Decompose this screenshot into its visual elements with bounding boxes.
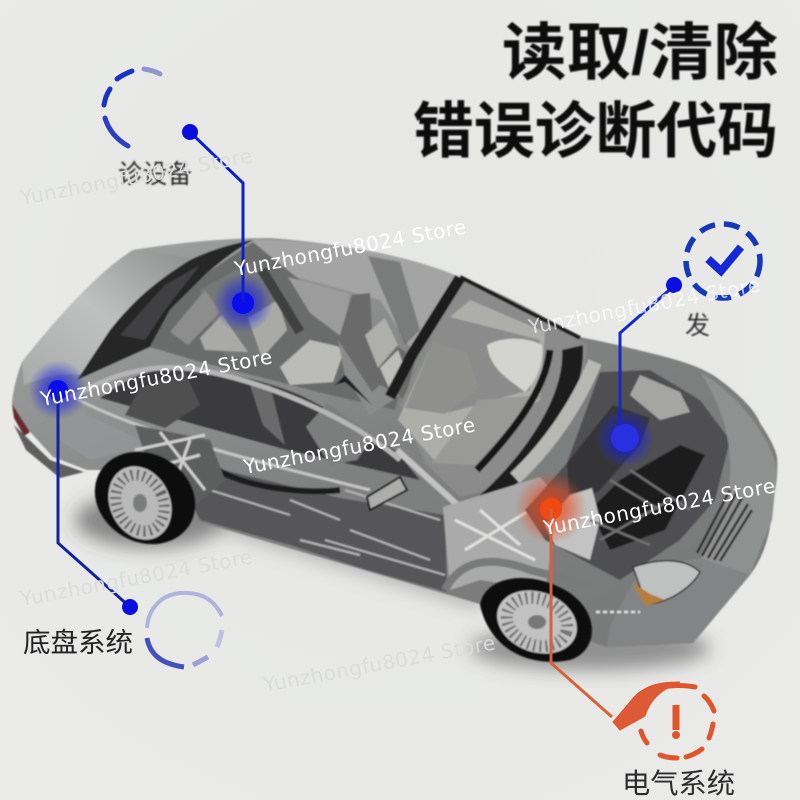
car ground shadow	[75, 492, 710, 670]
node dots	[122, 124, 682, 615]
roof	[240, 240, 460, 352]
watermarks: Yunzhongfu8024 Store	[18, 143, 254, 210]
trunk lid	[22, 250, 190, 385]
car body	[12, 238, 777, 647]
icon: chassis dashed ring	[147, 593, 222, 667]
glow: seat	[213, 273, 273, 333]
hotspot dots	[48, 292, 639, 520]
front fender	[443, 477, 560, 590]
connector: chassis	[58, 390, 130, 607]
label: chassis system: 底盘系统	[23, 628, 133, 658]
interior cabin base	[150, 242, 410, 410]
rear suspension	[135, 425, 225, 505]
watermarks: Yunzhongfu8024 Store	[541, 473, 777, 540]
glow: electrical	[515, 472, 587, 544]
watermarks: Yunzhongfu8024 Store	[232, 214, 468, 281]
front bumper and headlight	[607, 558, 750, 647]
dark dash vents	[477, 350, 550, 470]
label: engine: 发	[685, 312, 710, 340]
watermarks: Yunzhongfu8024 Store	[241, 412, 477, 479]
a-pillar	[390, 278, 460, 397]
title	[413, 19, 778, 165]
icon: diagnostic equipment dashed ring	[104, 69, 160, 146]
rear door panel	[288, 277, 350, 337]
watermarks: Yunzhongfu8024 Store	[18, 544, 254, 611]
watermarks: Yunzhongfu8024 Store	[526, 272, 762, 339]
rear seats	[170, 262, 300, 360]
cabin floor	[280, 340, 345, 385]
icon: electrical warning ring	[613, 682, 714, 758]
label: diagnostic equipment: 诊设备	[118, 159, 192, 189]
windshield interior	[400, 277, 587, 497]
car illustration	[12, 238, 777, 647]
label: electrical system: 电气系统	[622, 768, 735, 799]
front seat	[335, 293, 415, 415]
glow: chassis	[28, 360, 88, 420]
seat through window	[306, 403, 373, 465]
connector: electrical	[551, 509, 612, 717]
connector: engine	[620, 285, 675, 425]
hood edge	[700, 372, 777, 575]
watermarks	[18, 143, 777, 697]
connector: diagnostic equipment	[190, 132, 243, 303]
rear wheel	[78, 434, 212, 562]
engine bay	[525, 370, 730, 580]
front grille	[697, 490, 752, 561]
taillight	[12, 404, 30, 436]
watermarks: Yunzhongfu8024 Store	[261, 630, 497, 697]
mirror	[367, 477, 407, 510]
rear window	[77, 240, 253, 380]
door lower dark panel	[190, 468, 447, 592]
rear side window	[100, 370, 420, 480]
front wheel	[480, 578, 592, 664]
icon: engine check ring	[686, 224, 760, 298]
glow: engine	[595, 408, 655, 468]
watermarks: Yunzhongfu8024 Store	[38, 344, 274, 411]
belt line highlights	[77, 368, 400, 460]
rear quarter panel	[58, 400, 160, 465]
title: 错误诊断代码	[413, 97, 778, 165]
title: 读取/清除	[502, 19, 778, 88]
